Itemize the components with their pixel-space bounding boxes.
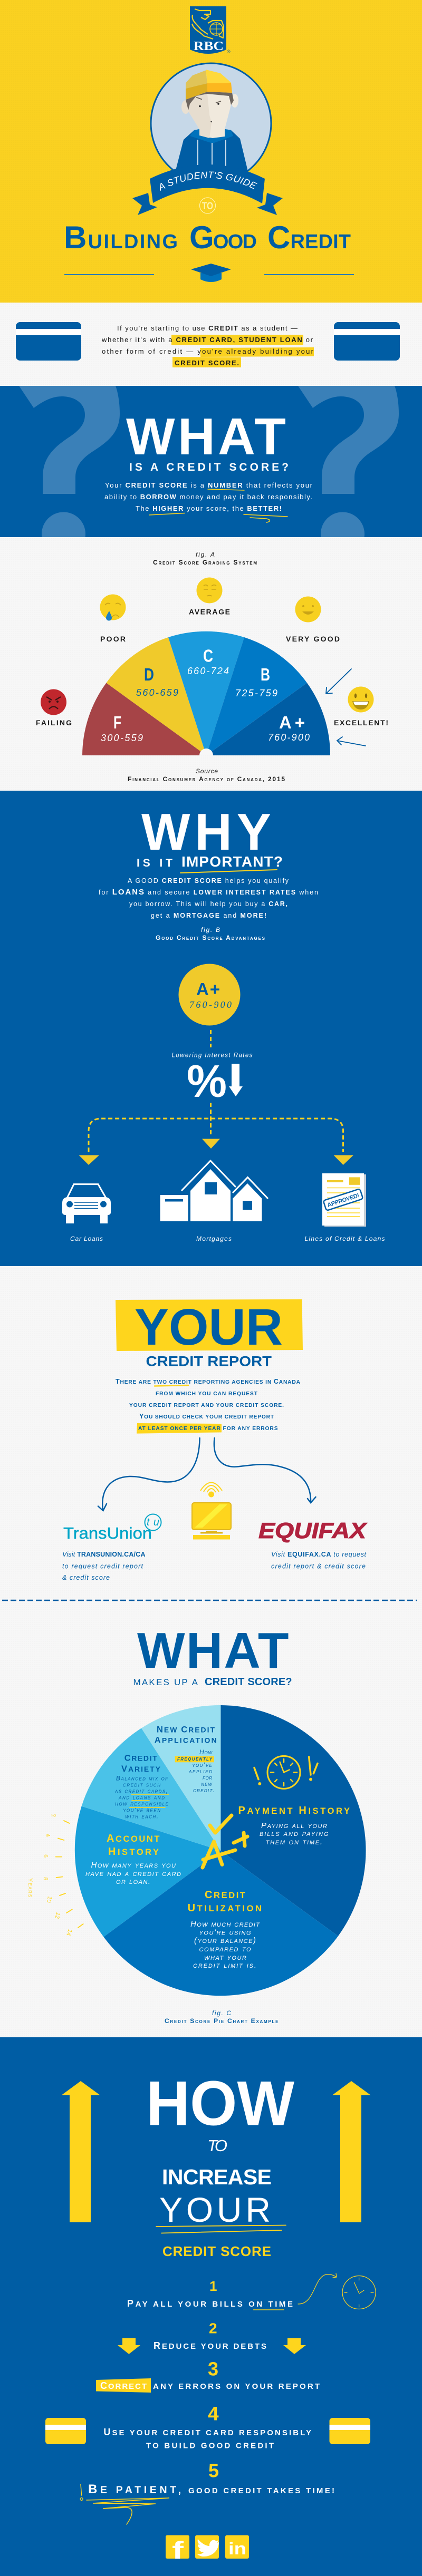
icon: twitter [195, 2535, 219, 2559]
equifax instructions: credit report & credit score [271, 1562, 366, 1570]
label: poor with crying face [100, 595, 126, 643]
segment: payment history: PAYMENT HISTORY [238, 1805, 350, 1816]
years scale: 4 [44, 1833, 51, 1837]
subheading: IS A CREDIT SCORE? [129, 461, 289, 473]
step 4: 4 [208, 2403, 219, 2425]
figure caption: fig. C [212, 2009, 231, 2017]
subheading: IMPORTANT? [181, 853, 283, 870]
years scale: 6 [42, 1854, 49, 1858]
segment: credit utilization: CREDIT [205, 1889, 245, 1901]
segment: new credit application: NEW CREDIT [157, 1725, 215, 1735]
segment: new credit application: you've [192, 1761, 213, 1768]
segment: credit variety [114, 1754, 169, 1820]
gauge chart: D [144, 665, 154, 684]
segment: credit variety: with each. [125, 1813, 158, 1820]
intro text: CREDIT SCORE. [175, 359, 239, 367]
icon: question mark left [19, 386, 120, 537]
icon: houses [160, 1161, 268, 1221]
icon: RBC logo: ® [227, 49, 231, 54]
icon: approved document: APPROVED! [327, 1192, 360, 1209]
arrow: upper pointer [326, 669, 351, 694]
gauge chart: B [261, 665, 270, 684]
gauge chart: 300-559 [101, 733, 143, 743]
step 3: 3 [208, 2358, 218, 2380]
heading: why: WHY [141, 803, 271, 861]
panel: what makes up a credit score [27, 1622, 366, 2025]
subheading [133, 1676, 292, 1688]
years scale [27, 1813, 83, 1937]
figure caption: Credit Score Pie Chart Example [165, 2017, 279, 2025]
years scale: 10 [45, 1895, 53, 1903]
figure caption [165, 2009, 279, 2025]
segment: credit variety: CREDIT [124, 1754, 157, 1763]
icon: linkedin [225, 2535, 249, 2559]
step 1: PAY ALL YOUR BILLS ON TIME [127, 2298, 293, 2309]
segment: credit utilization: UTILIZATION [188, 1902, 262, 1914]
heading: how: HOW [146, 2068, 295, 2139]
logo: transunion: TransUnion [63, 1524, 152, 1542]
source note: Source [196, 767, 218, 775]
segment: credit utilization: you're using [199, 1928, 251, 1937]
transunion instructions: & credit score [62, 1574, 110, 1581]
step 3: CORRECT [100, 2380, 147, 2391]
heading: what: WHAT [126, 407, 286, 465]
gauge chart: F [113, 713, 121, 732]
label: failing with angry face: FAILING [36, 718, 72, 727]
step 4: USE YOUR CREDIT CARD RESPONSIBLY [103, 2427, 311, 2437]
heading: your: YOUR [135, 1298, 283, 1356]
step 5 [80, 2460, 334, 2524]
segment: credit utilization: compared to [199, 1945, 251, 1953]
figure caption: Credit Score Grading System [153, 559, 257, 566]
badge: to: TO [202, 201, 213, 212]
icon: car [62, 1184, 111, 1223]
icon: facebook: f [172, 2536, 184, 2564]
explanation text: get a MORTGAGE and MORE! [151, 912, 266, 919]
step 2: 2 [209, 2320, 217, 2337]
heading: your: YOUR [159, 2190, 271, 2229]
heading: increase: INCREASE [162, 2165, 272, 2189]
figure caption: fig. B [201, 926, 220, 934]
source note: Financial Consumer Agency of Canada, 2015 [128, 775, 285, 783]
years scale: 14 [65, 1928, 73, 1937]
icon: clock with exclamations [254, 1756, 318, 1788]
banner: a student's guide: A STUDENT'S GUIDE [160, 172, 257, 191]
segment: credit variety: how responsible [115, 1800, 169, 1807]
intro text: whether it's with a CREDIT CARD, STUDENT LOAN or [101, 336, 313, 344]
segment: account history: How many years you [91, 1861, 176, 1870]
segment: account history [85, 1833, 181, 1886]
explanation text [104, 481, 313, 512]
years scale: Years [27, 1878, 33, 1897]
panel: what is a credit score [0, 386, 422, 537]
step 5: B E PATIENT, [88, 2482, 181, 2496]
explanation text: The HIGHER your score, the BETTER! [136, 504, 282, 512]
segment: account history: have had a credit card [85, 1869, 181, 1878]
segment: credit utilization: what your [204, 1953, 246, 1962]
equifax instructions: Visit EQUIFAX.CA to request [271, 1551, 367, 1558]
panel: your credit report [62, 1298, 368, 1581]
segment: payment history: them on time. [266, 1838, 322, 1846]
report explanation: THERE ARE TWO CREDIT REPORTING AGENCIES IN CANADA [116, 1378, 301, 1385]
explanation text: Your CREDIT SCORE is a NUMBER that reflects your [105, 481, 313, 489]
segment: account history: ACCOUNT [107, 1833, 159, 1844]
segment: credit variety: and loans and [118, 1794, 165, 1801]
arrow: to equifax [214, 1438, 315, 1503]
segment: new credit application: new [201, 1780, 213, 1787]
title [64, 220, 351, 255]
logo: transunion: tu [147, 1517, 159, 1528]
icon: approved document [322, 1173, 366, 1227]
step 3 [96, 2358, 320, 2393]
panel: how to increase your credit score [0, 2037, 422, 2576]
icon: RBC logo [190, 6, 231, 54]
underline [180, 870, 277, 873]
label: failing with angry face [36, 689, 72, 727]
icon: linkedin: in [228, 2539, 246, 2558]
badge: A+ score: 760-900 [189, 999, 232, 1010]
segment: new credit application: frequently [177, 1755, 213, 1762]
segment: payment history [238, 1805, 350, 1846]
segment: credit utilization: (your balance) [194, 1936, 256, 1945]
segment: credit variety: credit such [123, 1781, 160, 1788]
label: excellent with grinning face: EXCELLENT! [334, 718, 388, 727]
equifax instructions [271, 1551, 367, 1570]
report explanation: FROM WHICH YOU CAN REQUEST [156, 1391, 258, 1397]
step 5: GOOD CREDIT TAKES TIME! [188, 2486, 334, 2495]
subheading: CREDIT SCORE? [205, 1676, 292, 1688]
step 2 [118, 2320, 306, 2354]
segment: credit variety: VARIETY [121, 1764, 161, 1774]
report explanation: YOU SHOULD CHECK YOUR CREDIT REPORT [139, 1413, 274, 1420]
segment: credit utilization: How much credit [190, 1920, 260, 1929]
label: lowering interest rates: Lowering Interest Rates [172, 1052, 253, 1058]
icon: question mark right [298, 386, 399, 537]
gauge chart [82, 631, 330, 755]
gauge chart: A+ [279, 713, 305, 732]
gauge chart: 560-659 [136, 687, 178, 698]
arrow: to transunion [98, 1438, 200, 1511]
segment: payment history: bills and paying [260, 1829, 329, 1838]
banner: a student's guide [132, 164, 283, 215]
badge: A+ score: A+ [196, 979, 220, 999]
heading: what: WHAT [137, 1622, 289, 1679]
highlight marks [171, 335, 314, 367]
arrow: lower pointer [337, 737, 366, 746]
label: average with neutral face: AVERAGE [189, 607, 230, 616]
icon: graduation cap divider [64, 264, 354, 282]
years scale: 8 [42, 1877, 49, 1881]
segment: payment history: Paying all your [261, 1821, 327, 1830]
labels: loan types: Mortgages [196, 1235, 232, 1242]
segment: new credit application: APPLICATION [155, 1736, 217, 1745]
highlight and underline marks [137, 1385, 222, 1434]
step 2: REDUCE YOUR DEBTS [154, 2340, 266, 2351]
report explanation [116, 1378, 301, 1432]
gauge chart: 725-759 [235, 688, 277, 698]
panel: credit score grading system [36, 551, 388, 783]
transunion instructions: to request credit report [62, 1562, 143, 1570]
years scale: 12 [54, 1911, 61, 1919]
segment: new credit application: for [203, 1774, 212, 1781]
segment: new credit application: applied [188, 1767, 212, 1775]
gauge chart: 660-724 [187, 666, 229, 676]
segment: credit variety: you've been [123, 1806, 160, 1814]
segment: new credit application [155, 1725, 217, 1794]
heading: credit score: CREDIT SCORE [162, 2243, 271, 2259]
dashed connector [210, 1030, 212, 1047]
transunion instructions: Visit TRANSUNION.CA/CA [62, 1551, 146, 1558]
segment: new credit application: How [199, 1748, 213, 1756]
panel: introduction [16, 322, 400, 367]
explanation text: you borrow. This will help you buy a CAR, [129, 900, 287, 908]
label: very good with smiling face: VERY GOOD [286, 635, 340, 643]
intro text: If you're starting to use CREDIT as a student — [117, 324, 298, 332]
dashed branching arrows [79, 1103, 353, 1165]
icon: facebook [166, 2535, 189, 2564]
title: BUILDING [64, 220, 178, 255]
label: poor with crying face: POOR [100, 635, 126, 643]
source note [128, 767, 285, 783]
step 3: ANY ERRORS ON YOUR REPORT [153, 2382, 320, 2391]
gauge chart: C [203, 646, 213, 665]
step 1 [127, 2273, 376, 2310]
figure caption: fig. A [196, 551, 215, 558]
intro text [101, 324, 314, 367]
hand-drawn underlines [149, 489, 287, 522]
subheading: CREDIT REPORT [146, 1354, 272, 1369]
label: average with neutral face [189, 578, 230, 616]
segment: new credit application: credit. [193, 1786, 215, 1794]
report explanation: AT LEAST ONCE PER YEAR FOR ANY ERRORS [138, 1426, 278, 1432]
segment: credit utilization: credit limit is. [193, 1961, 256, 1970]
explanation text [99, 877, 318, 919]
underlines [156, 2225, 286, 2233]
explanation text: ability to BORROW money and pay it back responsibly. [104, 493, 312, 501]
report explanation: YOUR CREDIT REPORT AND YOUR CREDIT SCORE. [129, 1403, 284, 1408]
logo: transunion [63, 1514, 161, 1542]
panel: why it is important [0, 791, 422, 1266]
label: excellent with grinning face [334, 686, 388, 727]
segment: credit utilization [188, 1889, 262, 1970]
title: GOOD [189, 220, 257, 255]
logo: equifax: EQUIFAX [258, 1518, 368, 1543]
step 1: 1 [209, 2278, 217, 2294]
segment: credit variety: Balanced mix of [116, 1775, 168, 1782]
explanation text: for LOANS and secure LOWER INTEREST RATES when [99, 888, 318, 897]
labels: loan types: Car Loans [70, 1235, 103, 1242]
arrow: right up [332, 2081, 371, 2222]
icon: computer with wifi [192, 1482, 231, 1539]
gauge chart: 760-900 [268, 732, 310, 743]
icon: credit card left [16, 322, 81, 361]
labels: loan types: Lines of Credit & Loans [305, 1235, 385, 1242]
figure caption [156, 926, 265, 941]
subheading [137, 853, 283, 870]
subheading: IS IT [137, 857, 172, 869]
label: very good with smiling face [286, 597, 340, 643]
step 4: TO BUILD GOOD CREDIT [146, 2442, 274, 2450]
labels: loan types [70, 1235, 385, 1242]
icon: percent down: % [187, 1056, 227, 1107]
figure caption: Good Credit Score Advantages [156, 934, 265, 941]
subheading: MAKES UP A [133, 1677, 198, 1687]
badge: A+ score [178, 964, 241, 1026]
illustration: student portrait [151, 63, 271, 183]
transunion instructions [62, 1551, 146, 1581]
years scale: 2 [50, 1813, 56, 1818]
step 4 [45, 2403, 370, 2450]
arrow: left up [61, 2081, 100, 2222]
step 5: 5 [208, 2460, 219, 2482]
segment: account history: HISTORY [108, 1846, 159, 1858]
intro text: other form of credit — you're already building your [102, 347, 314, 355]
pie chart [75, 1705, 366, 1996]
figure caption [153, 551, 257, 566]
segment: account history: or loan. [116, 1877, 150, 1886]
title: CREDIT [267, 220, 351, 255]
explanation text: A GOOD CREDIT SCORE helps you qualify [128, 877, 289, 884]
segment: credit variety: as credit cards, [114, 1787, 168, 1795]
icon: RBC logo: RBC [194, 40, 224, 53]
panel: cover header [0, 0, 422, 303]
icon: credit card right [334, 322, 400, 361]
badge: to [199, 198, 215, 213]
icon: check mark and A+ [203, 1815, 247, 1868]
heading: to: TO [207, 2136, 227, 2155]
